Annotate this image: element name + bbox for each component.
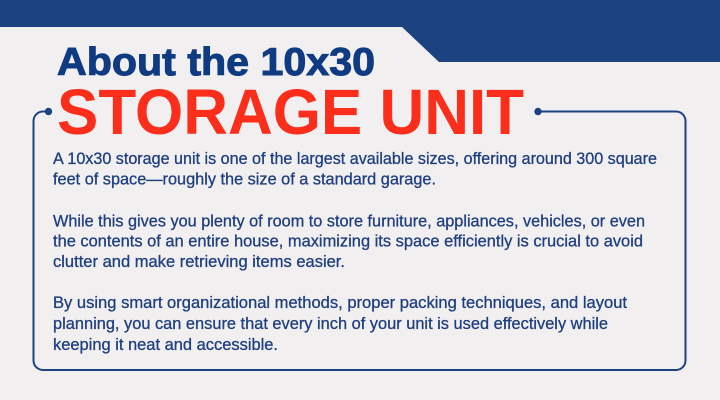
paragraph 2: clutter and make retrieving items easier. xyxy=(53,253,345,271)
paragraph 3: planning, you can ensure that every inch of your unit is used effectively while xyxy=(53,315,608,333)
header banner xyxy=(0,0,720,62)
paragraph 3: keeping it neat and accessible. xyxy=(53,336,278,354)
left connector dot xyxy=(45,108,52,115)
paragraph 2 xyxy=(53,212,645,271)
paragraph 2: While this gives you plenty of room to store furniture, appliances, vehicles, or even xyxy=(53,212,645,230)
paragraph 1 xyxy=(53,150,657,188)
right connector dot xyxy=(534,108,542,115)
text panel outline xyxy=(34,108,686,370)
paragraph 2: the contents of an entire house, maximizing its space efficiently is crucial to avoid xyxy=(53,232,643,250)
paragraph 3: By using smart organizational methods, proper packing techniques, and layout xyxy=(53,294,627,312)
paragraph 3 xyxy=(53,294,627,354)
paragraph 1: feet of space—roughly the size of a standard garage. xyxy=(53,170,436,188)
title: About the 10x30: About the 10x30 xyxy=(57,41,375,84)
paragraph 1: A 10x30 storage unit is one of the largest available sizes, offering around 300 square xyxy=(53,150,657,168)
title: STORAGE UNIT: STORAGE UNIT xyxy=(57,76,524,148)
